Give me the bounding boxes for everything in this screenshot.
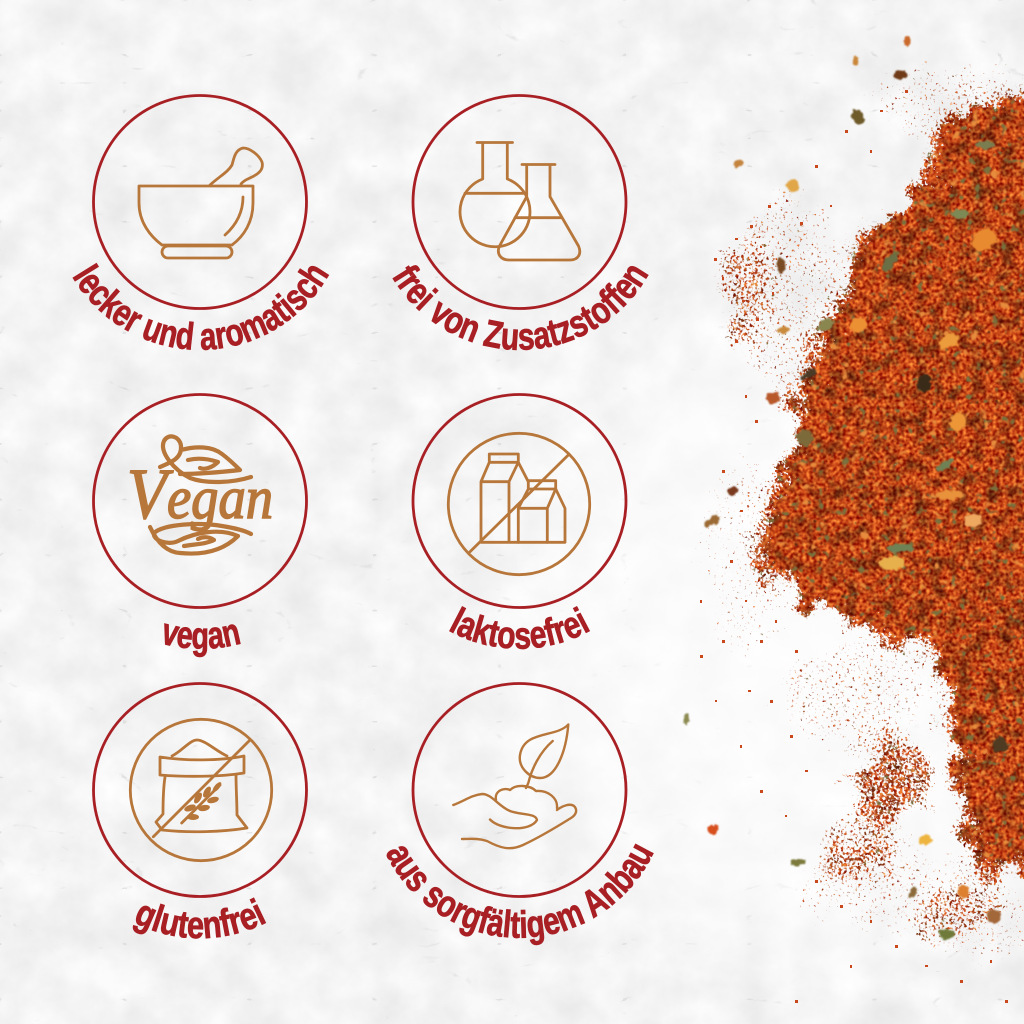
panel: frei von Zusatzstoffen <box>392 94 649 350</box>
icon: hand holding seedling <box>453 724 576 848</box>
icon: mortar and pestle <box>139 148 262 258</box>
label: vegan <box>164 623 241 658</box>
spice pile <box>695 60 1024 970</box>
badge ring <box>413 684 626 896</box>
icon: crossed-out flour sack <box>130 719 272 861</box>
badge ring <box>413 394 626 608</box>
badge ring <box>94 394 306 608</box>
badge ring <box>94 684 306 896</box>
icon: lab flasks <box>460 142 580 260</box>
label: glutenfrei <box>132 897 266 939</box>
loose spice specks <box>700 90 1008 1003</box>
bottom leaf flourish <box>150 524 251 554</box>
loose spice flakes <box>683 37 1008 939</box>
panel: vegan <box>92 393 308 658</box>
panel: laktosefrei <box>412 393 628 650</box>
badge ring <box>94 96 306 308</box>
script word: Vegan <box>127 454 273 534</box>
label: lecker und aromatisch <box>72 262 330 350</box>
label: laktosefrei <box>449 606 590 650</box>
top leaf flourish <box>160 436 251 482</box>
panel: aus sorgfältigem Anbau <box>386 682 654 946</box>
label: frei von Zusatzstoffen <box>392 265 649 350</box>
badge ring <box>413 96 626 308</box>
panel: lecker und aromatisch <box>72 94 330 350</box>
label: aus sorgfältigem Anbau <box>386 844 654 946</box>
icon: crossed-out milk cartons <box>448 433 590 575</box>
icon: vegan script logo <box>127 436 273 554</box>
panel: glutenfrei <box>92 682 308 939</box>
